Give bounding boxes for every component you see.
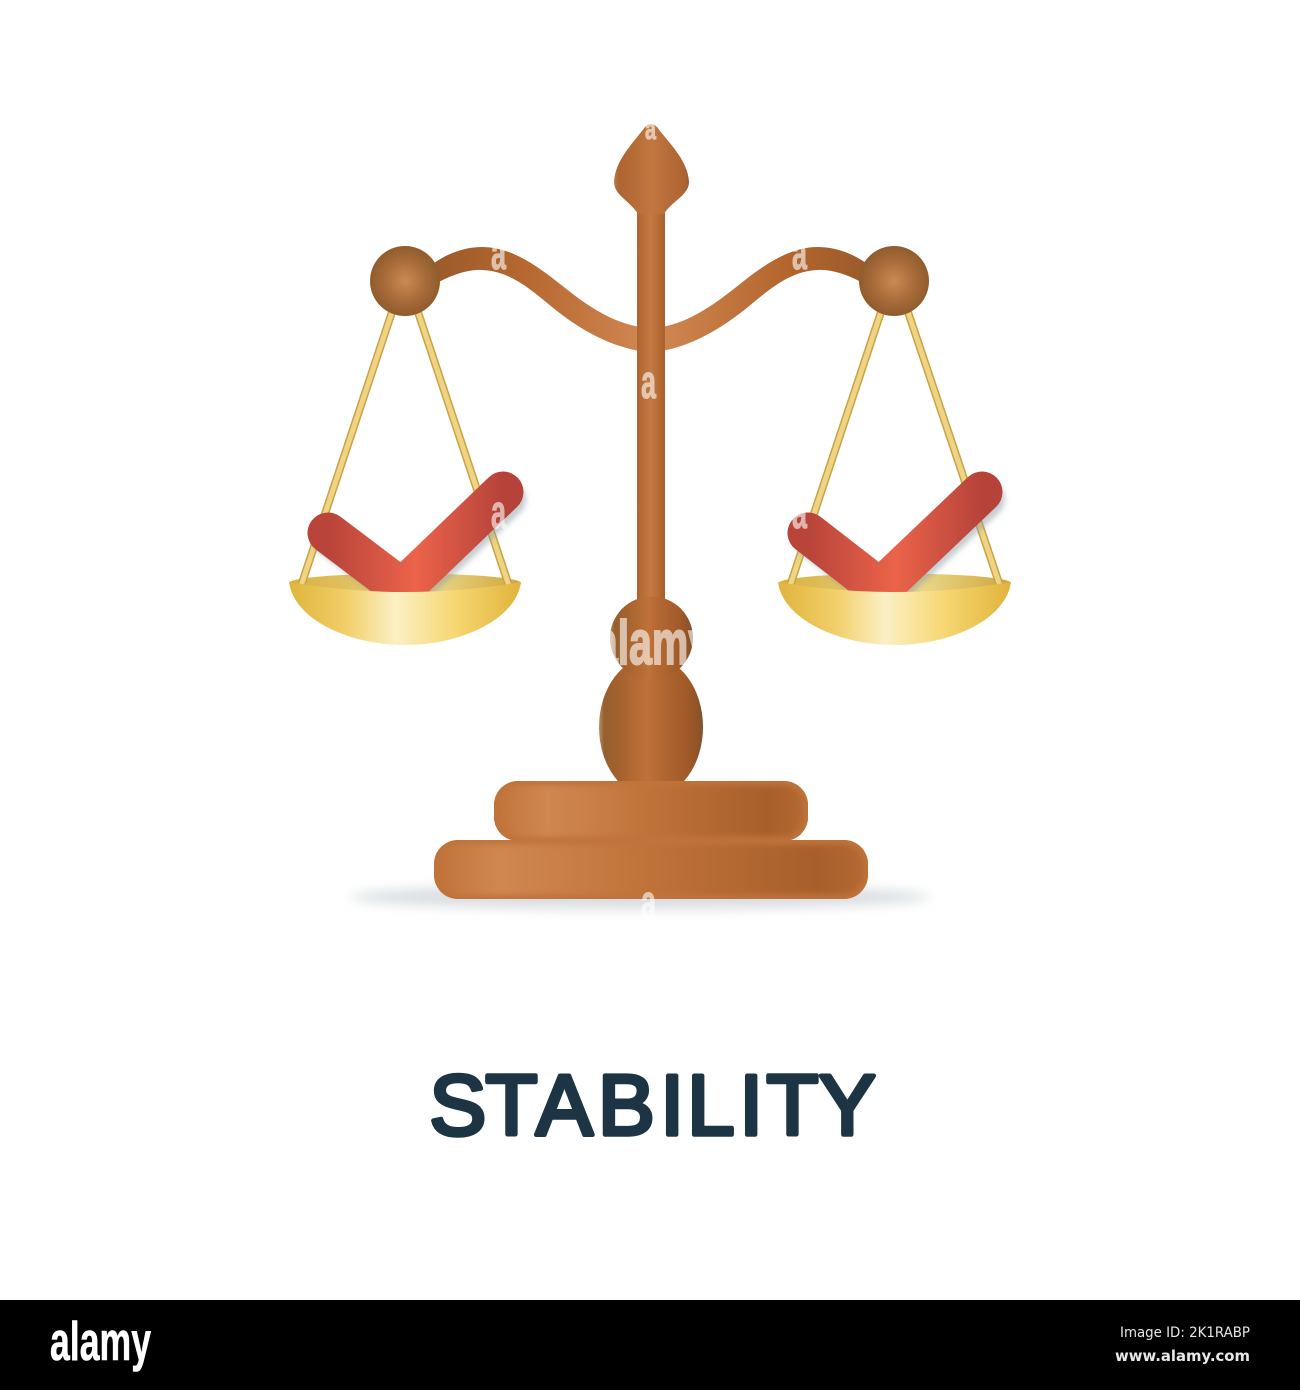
- watermark marks: a: [792, 226, 807, 279]
- watermark marks: alamy: [595, 609, 711, 678]
- right check shadow: [812, 499, 986, 594]
- right beam: [662, 247, 875, 351]
- image id: Image ID: 2K1RABP: [1120, 1325, 1250, 1341]
- site url: www.alamy.com: [1115, 1347, 1250, 1365]
- left check mark: [328, 492, 503, 589]
- left check shadow: [332, 499, 507, 594]
- pole: [637, 205, 665, 605]
- title: STABILITY: [430, 1058, 876, 1154]
- left ball: [370, 246, 440, 316]
- watermark marks: a: [645, 113, 656, 146]
- right check mark: [808, 492, 982, 589]
- watermark marks: a: [641, 875, 656, 928]
- left pan back: [289, 574, 521, 592]
- watermark marks: a: [641, 355, 656, 408]
- base top tier: [494, 781, 808, 841]
- watermark marks: a: [491, 485, 506, 538]
- pole finial: [614, 124, 689, 214]
- stand lower bulb: [599, 657, 703, 797]
- icon: balance scale: [289, 113, 1011, 928]
- watermark marks: a: [491, 226, 506, 279]
- left pan: [289, 582, 521, 645]
- right ball: [859, 246, 929, 316]
- watermark marks: [491, 113, 807, 928]
- stand upper knob: [610, 596, 693, 680]
- right pan strings: [790, 312, 1000, 586]
- footer logo: alamy: [50, 1310, 151, 1372]
- watermark marks: a: [792, 485, 807, 538]
- base bottom tier: [434, 840, 868, 899]
- ground shadow: [350, 885, 930, 909]
- right pan: [778, 582, 1011, 645]
- right pan back: [779, 574, 1011, 592]
- left beam: [425, 247, 640, 351]
- left pan strings: [301, 312, 509, 586]
- footer bar: [0, 1300, 1300, 1390]
